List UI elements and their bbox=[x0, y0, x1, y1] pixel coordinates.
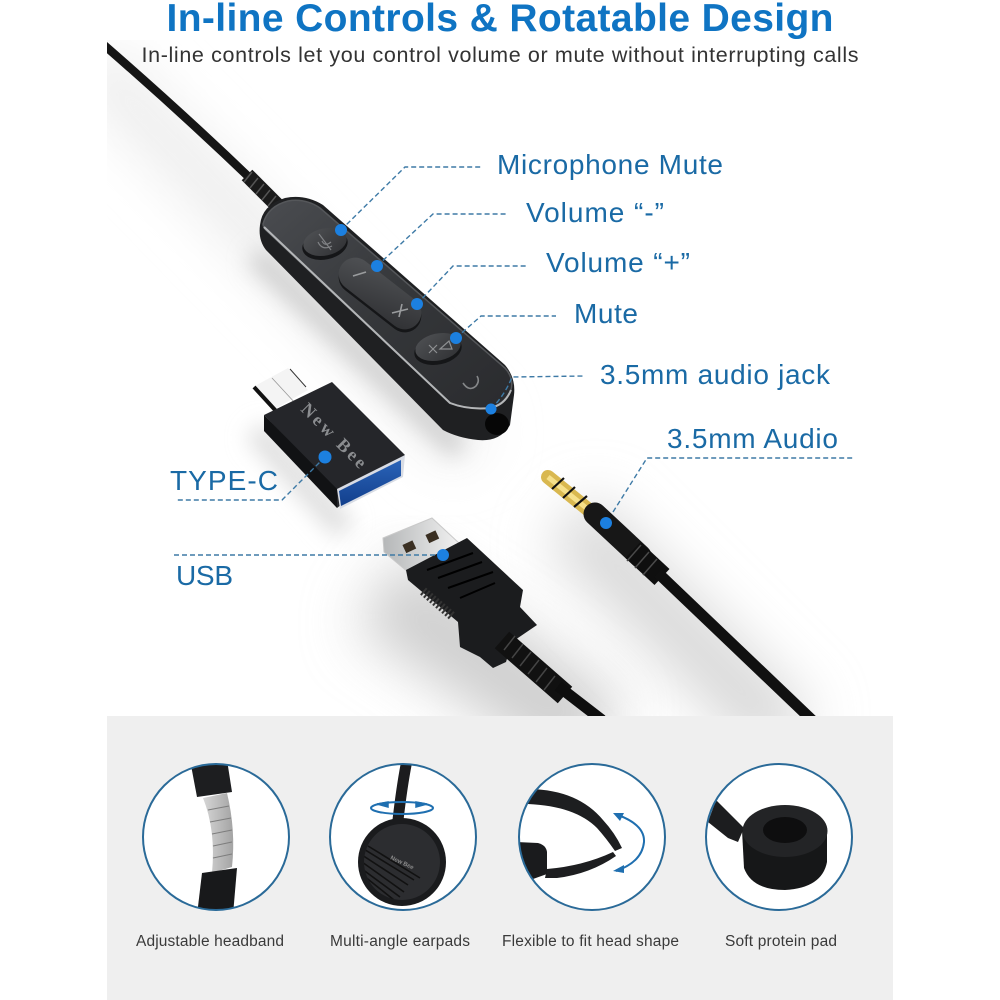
remote body bbox=[260, 197, 514, 440]
plug body bbox=[406, 538, 537, 668]
callout: volume down bbox=[371, 197, 664, 272]
usb cable bbox=[563, 688, 606, 716]
audio cable bbox=[658, 573, 812, 720]
feature: adjustable headband bbox=[136, 760, 289, 950]
headset cable bbox=[104, 45, 286, 214]
callout: type-c bbox=[170, 450, 332, 500]
remote face bbox=[263, 200, 512, 408]
callout: volume up bbox=[411, 247, 690, 310]
3.5mm audio plug bbox=[548, 477, 812, 720]
callout: mute bbox=[450, 298, 638, 344]
callout: microphone mute: Microphone Mute bbox=[497, 149, 723, 180]
c plug bbox=[253, 368, 308, 410]
metal shell bbox=[383, 518, 460, 572]
feature: soft protein pad bbox=[706, 764, 852, 950]
callout: 3.5mm audio jack bbox=[486, 359, 831, 414]
caption: Flexible to fit head shape bbox=[502, 933, 679, 950]
caption: Adjustable headband bbox=[136, 933, 284, 950]
type-c adapter bbox=[253, 368, 405, 509]
callout: 3.5mm audio bbox=[600, 423, 855, 529]
adapter body bbox=[264, 382, 405, 508]
subtitle: In-line controls let you control volume or mute without interrupting calls bbox=[142, 43, 858, 67]
button: mute bbox=[414, 333, 462, 365]
callout: volume down: Volume “-” bbox=[526, 197, 664, 228]
gold tip bbox=[548, 477, 590, 511]
button: microphone mute bbox=[302, 234, 348, 260]
caption: Soft protein pad bbox=[725, 933, 837, 950]
plug strain relief bbox=[633, 550, 662, 577]
callout: usb: USB bbox=[176, 560, 233, 591]
usb port bbox=[339, 460, 401, 506]
callout: 3.5mm audio jack: 3.5mm audio jack bbox=[600, 359, 831, 390]
caption: Multi-angle earpads bbox=[330, 933, 470, 950]
callout: 3.5mm audio: 3.5mm Audio bbox=[667, 423, 838, 454]
brand text: New Bee bbox=[297, 399, 371, 472]
sleeve bbox=[595, 514, 640, 556]
callout: type-c: TYPE-C bbox=[170, 465, 278, 496]
callout: microphone mute bbox=[335, 149, 723, 236]
feature: multi-angle earpads bbox=[330, 760, 476, 950]
button: volume rocker bbox=[338, 258, 422, 332]
callout: usb bbox=[174, 549, 449, 591]
strain relief bbox=[502, 640, 565, 695]
feature: multi-angle earpads: New Bee bbox=[389, 855, 415, 872]
icon: headphone bbox=[463, 376, 478, 388]
panel: product photo area bbox=[107, 42, 818, 716]
audio jack hole bbox=[485, 413, 509, 435]
feature: flexible to fit head shape bbox=[502, 764, 679, 950]
callout: volume up: Volume “+” bbox=[546, 247, 690, 278]
inline remote control bbox=[260, 197, 514, 440]
callout: mute: Mute bbox=[574, 298, 638, 329]
usb-a plug bbox=[383, 518, 602, 720]
panel: feature strip bbox=[107, 716, 893, 1000]
